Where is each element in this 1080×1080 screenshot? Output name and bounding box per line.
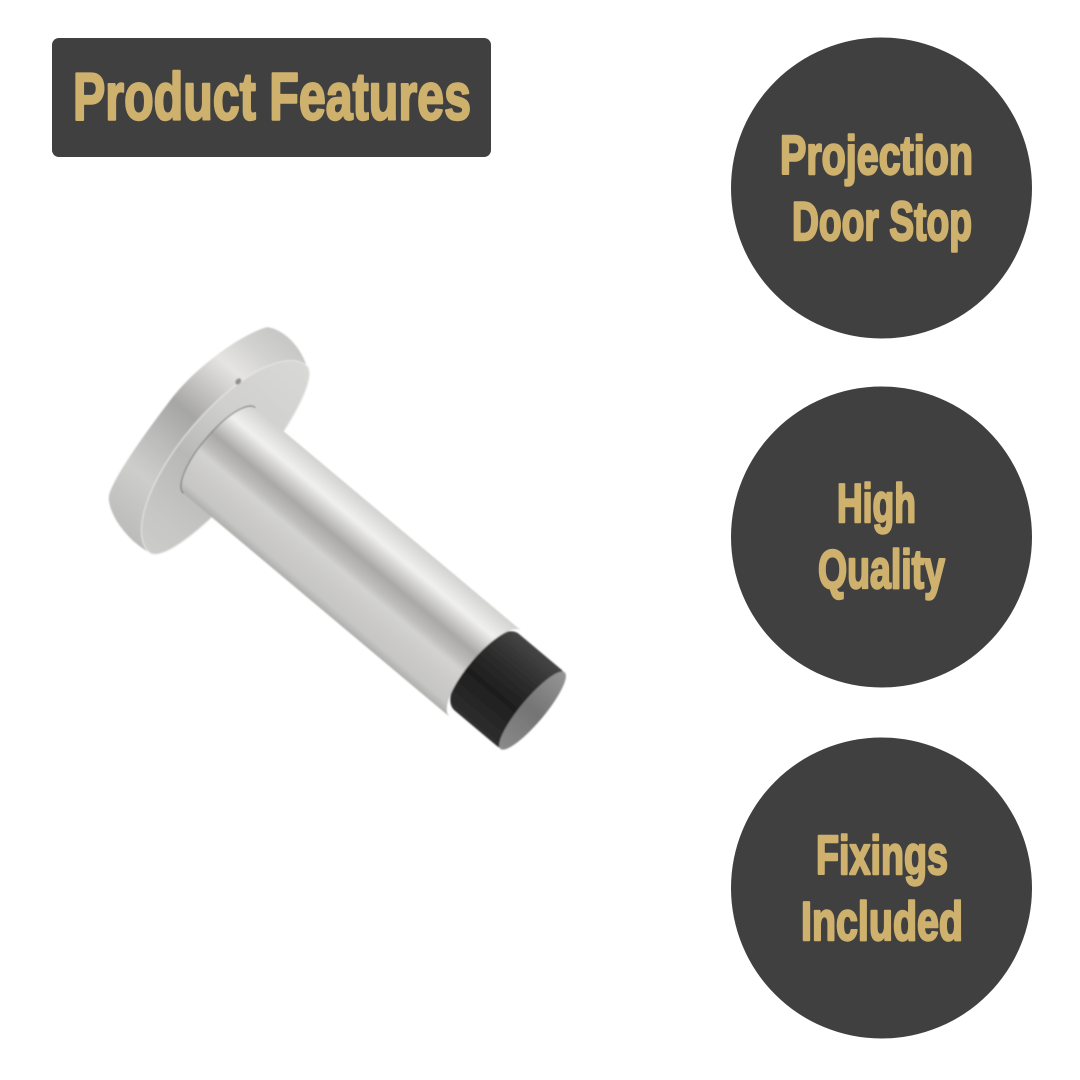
rubber buffer	[438, 620, 567, 751]
feature badge: High Quality	[731, 386, 1032, 688]
rubber tip face	[491, 665, 574, 757]
badge label line 2: Door Stop	[792, 190, 972, 252]
badge label line 1: High	[837, 472, 916, 534]
rim screw dimple	[234, 377, 242, 386]
badge circle	[731, 386, 1032, 688]
panel: title banner	[52, 38, 491, 157]
title: Product Features	[73, 60, 471, 134]
wall plate rim	[85, 305, 313, 554]
banner background	[52, 38, 491, 157]
badge circle	[731, 738, 1032, 1038]
wall plate face	[113, 335, 328, 570]
badge label line 2: Quality	[818, 538, 945, 600]
badge label line 2: Included	[801, 890, 963, 952]
badge circle	[731, 38, 1032, 338]
steel barrel	[170, 396, 521, 716]
feature badge: Fixings Included	[731, 738, 1032, 1038]
badge label line 1: Projection	[780, 124, 973, 186]
barrel base seam	[170, 396, 255, 493]
badge label line 1: Fixings	[816, 824, 948, 886]
feature badge: Projection Door Stop	[731, 38, 1032, 338]
product image: projection door stop	[85, 305, 624, 815]
